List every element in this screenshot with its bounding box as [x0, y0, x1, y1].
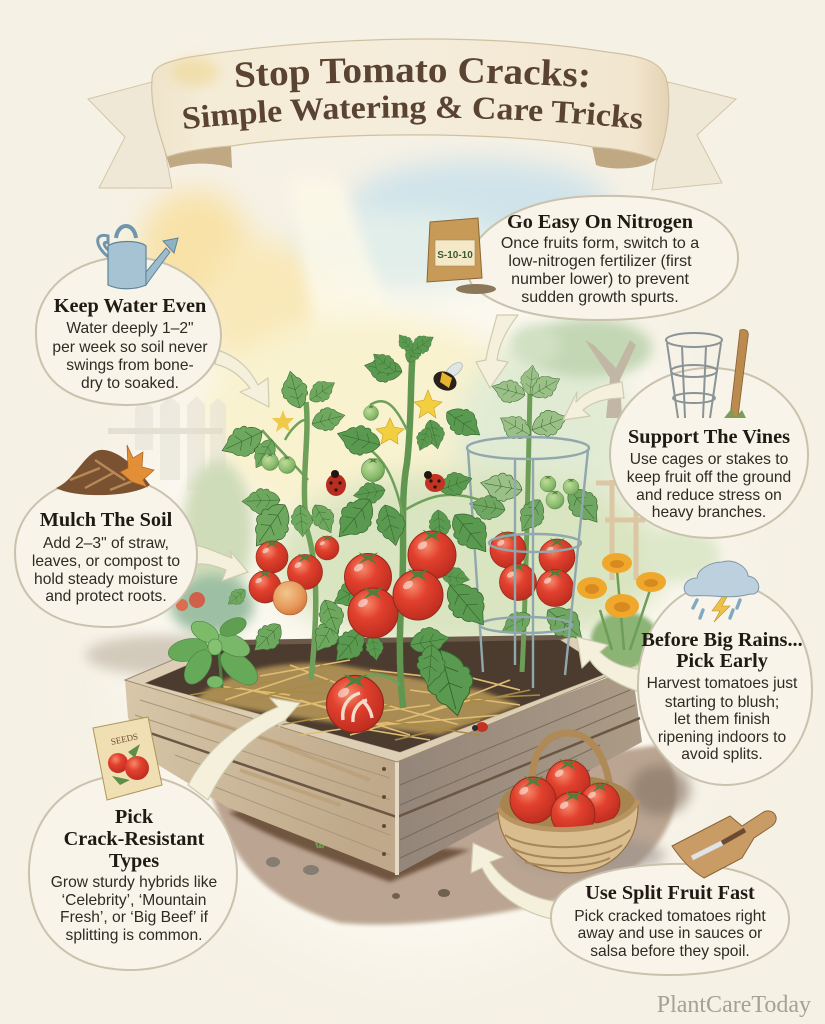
left plant ripe fruit [249, 535, 339, 615]
bubble [638, 583, 812, 785]
bubble [610, 368, 808, 538]
straw base wash [195, 663, 520, 735]
marigolds [577, 553, 666, 668]
right ribbon tail [652, 82, 736, 190]
heading: Crack-Resistant [64, 828, 205, 850]
panel: pick crack-resistant types [29, 717, 237, 970]
panel: support the vines [610, 329, 808, 538]
basket with tomatoes [498, 733, 638, 873]
icon: cutting board with knife [672, 811, 776, 878]
heading: Mulch The Soil [40, 509, 173, 531]
bumblebee [430, 360, 465, 394]
body text: Use cages or stakes to [630, 451, 789, 468]
bed back inner wall [125, 635, 635, 762]
small yellow flower [272, 410, 294, 432]
heading: Support The Vines [628, 426, 790, 448]
arrow: mulch [193, 545, 248, 581]
heading: Pick Early [676, 650, 768, 672]
arrow: crack-resistant [188, 698, 300, 800]
cracked tomato [326, 674, 400, 732]
center plant ripe fruit [344, 530, 456, 638]
ground soil [210, 745, 690, 925]
body text: dry to soaked. [81, 375, 179, 392]
heading: Use Split Fruit Fast [585, 882, 755, 904]
watermark: PlantCareToday [657, 992, 811, 1018]
body text: per week so soil never [52, 339, 208, 356]
body text: low-nitrogen fertilizer (first [508, 253, 692, 270]
basil plant [166, 614, 264, 691]
bed top rim [125, 636, 635, 762]
left fold [166, 146, 232, 168]
title banner [87, 38, 737, 190]
basket body [498, 800, 638, 873]
body text: heavy branches. [652, 504, 766, 521]
ladybug left [326, 470, 346, 496]
body text: sudden growth spurts. [521, 289, 679, 306]
heading: Before Big Rains... [641, 629, 803, 651]
heading: Types [109, 850, 159, 872]
bubble [15, 477, 197, 627]
body text: ripening indoors to [658, 729, 786, 746]
body text: hold steady moisture [34, 571, 178, 588]
body text: Pick cracked tomatoes right [574, 908, 766, 925]
title text line 2: Simple Watering & Care Tricks [183, 96, 642, 131]
panel: before big rains [638, 561, 812, 785]
body text: and reduce stress on [636, 487, 782, 504]
arrow: split fruit [471, 843, 558, 920]
icon: cage and stake [666, 329, 748, 418]
body text: keep fruit off the ground [627, 469, 791, 486]
straw mulch [190, 660, 540, 740]
body text: number lower) to prevent [511, 271, 689, 288]
body text: Harvest tomatoes just [647, 675, 798, 692]
right fold [592, 146, 657, 169]
left ribbon tail [88, 82, 172, 188]
tomato cage [467, 437, 589, 688]
body text: Once fruits form, switch to a [501, 235, 699, 252]
body text: Water deeply 1–2" [66, 320, 194, 337]
ladybug right [424, 471, 445, 492]
icon: mulch pile and leaf [56, 445, 154, 495]
basket interior [500, 775, 636, 835]
icon: watering can [98, 226, 178, 289]
arrow: before rains [577, 637, 645, 692]
heading: Keep Water Even [54, 295, 206, 317]
body text: Fresh’, or ‘Big Beef’ if [60, 909, 209, 926]
background garden foliage [85, 460, 254, 675]
right plant in cage [467, 364, 608, 688]
panel: mulch the soil [15, 445, 197, 627]
body text: swings from bone- [66, 357, 194, 374]
body text: Add 2–3" of straw, [43, 535, 169, 552]
soil [146, 640, 610, 752]
panel: go easy on nitrogen [427, 196, 738, 320]
bubble [29, 775, 237, 970]
body text: away and use in sauces or [578, 925, 762, 942]
green fruit cluster [540, 476, 579, 509]
icon: fertilizer bag [427, 218, 496, 294]
ladybug on rim [472, 722, 488, 732]
body text: Grow sturdy hybrids like [51, 874, 217, 891]
body text: ‘Celebrity’, ‘Mountain [62, 892, 206, 909]
center plant green fruit [362, 405, 384, 482]
center plant [326, 330, 499, 732]
body text: starting to blush; [665, 694, 779, 711]
wood seams and grain [135, 690, 640, 875]
bed right face [397, 668, 642, 874]
background tree [510, 318, 652, 418]
body text: leaves, or compost to [32, 553, 180, 570]
heading: Go Easy On Nitrogen [507, 211, 693, 233]
arrow: keep water even [215, 350, 269, 407]
panel: use split fruit fast [551, 811, 789, 975]
icon: seed packet: SEEDS [110, 731, 139, 747]
body text: and protect roots. [45, 588, 167, 605]
body text: let them finish [674, 711, 770, 728]
arrows [188, 315, 645, 920]
body text: avoid splits. [681, 746, 763, 763]
arrow: nitrogen [476, 315, 518, 388]
title text: Stop Tomato Cracks: [236, 58, 588, 92]
bed left face [125, 680, 397, 874]
faded picket fence [108, 396, 226, 490]
panel: keep water even [36, 226, 221, 405]
heading: Pick [115, 806, 154, 828]
watercolor scenery wash [120, 160, 720, 960]
body text: salsa before they spoil. [590, 943, 750, 960]
basket tomatoes [510, 759, 620, 836]
icon: fertilizer bag: S-10-10 [437, 250, 473, 261]
arrow: support [563, 382, 624, 420]
bubble [551, 864, 789, 975]
left plant [216, 368, 349, 680]
banner main [152, 39, 669, 160]
raised wooden bed [125, 635, 642, 875]
ripe fruit cluster [490, 531, 575, 606]
basket handle [532, 733, 612, 820]
icon: rain cloud [684, 561, 759, 622]
bubble [36, 257, 221, 405]
yellow flowers [376, 390, 442, 444]
bubble [468, 196, 738, 320]
body text: splitting is common. [66, 927, 202, 944]
icon: seed packet [93, 717, 162, 800]
left plant green fruit [262, 453, 296, 474]
background garden trellis [596, 480, 720, 581]
